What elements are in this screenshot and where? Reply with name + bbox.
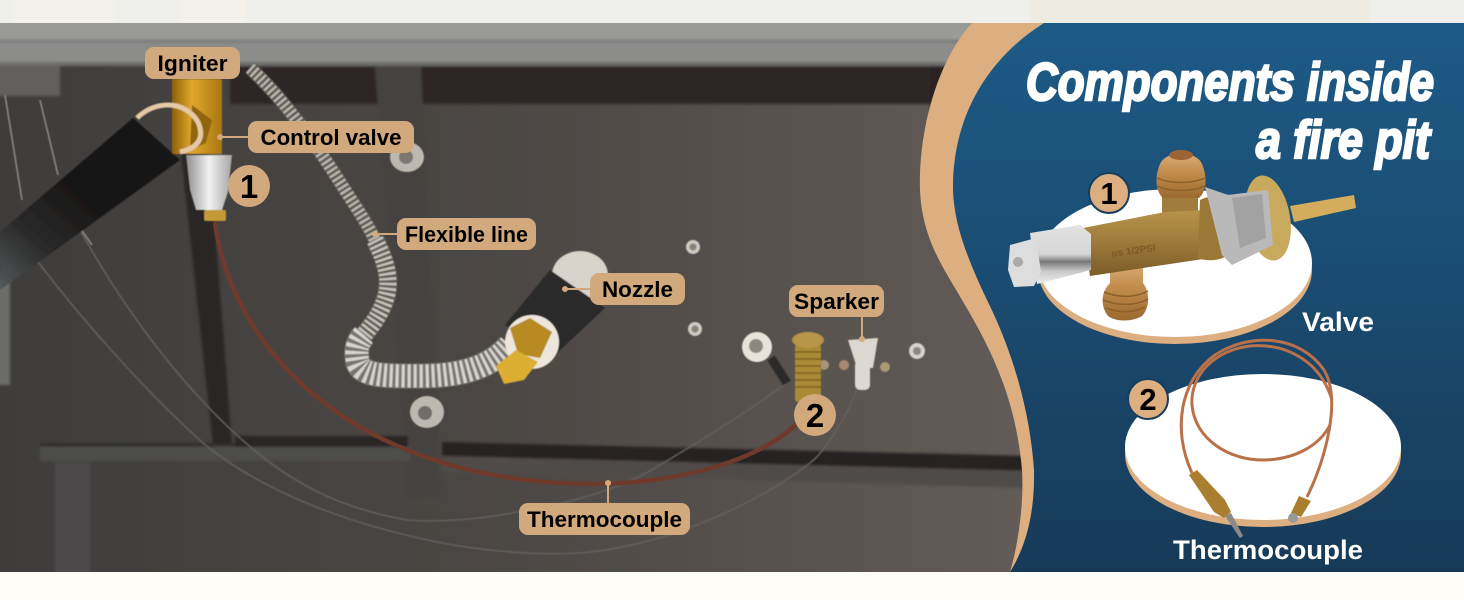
title xyxy=(1026,53,1434,170)
brass body xyxy=(1083,210,1210,276)
callout: Nozzle xyxy=(562,273,685,305)
lower flare fitting xyxy=(1103,262,1148,320)
callout: Flexible line: Flexible line xyxy=(405,222,528,247)
screws xyxy=(390,142,925,428)
thermocouple display disc xyxy=(1125,374,1401,527)
thermocouple product xyxy=(1181,340,1332,538)
lower channel right xyxy=(442,442,1030,471)
number badge 1, photo xyxy=(228,165,270,207)
number badge 1, panel: 1 xyxy=(1100,176,1118,211)
number badge 2, photo: 2 xyxy=(806,397,824,434)
vertical strut xyxy=(374,66,424,105)
callout: Igniter: Igniter xyxy=(158,51,228,76)
silver cap xyxy=(1030,225,1091,284)
blue panel xyxy=(953,23,1464,572)
brass control valve in photo xyxy=(137,79,232,221)
callout: Nozzle: Nozzle xyxy=(602,277,673,302)
number badge 2, panel xyxy=(1128,379,1168,419)
angled gap xyxy=(175,100,232,445)
dark recess under beam xyxy=(229,65,932,105)
nozzle xyxy=(496,251,608,384)
number badge 2, photo xyxy=(794,394,836,436)
left bracket xyxy=(0,66,60,96)
callout: Thermocouple: Thermocouple xyxy=(527,507,682,532)
number badge 1, photo: 1 xyxy=(240,168,258,205)
sparker hardware xyxy=(742,332,878,402)
callout: Sparker xyxy=(789,285,884,342)
top flare fitting xyxy=(1162,195,1198,228)
callout: Control valve xyxy=(217,121,414,153)
callout: Sparker: Sparker xyxy=(794,289,879,314)
black gas hose xyxy=(0,118,180,290)
callout: Control valve: Control valve xyxy=(260,125,402,150)
curved tan border xyxy=(920,23,1100,572)
number badge 2, panel: 2 xyxy=(1139,382,1157,417)
label: Thermocouple, panel: Thermocouple xyxy=(1173,535,1363,565)
callout: Igniter xyxy=(145,47,240,79)
stem xyxy=(1290,195,1356,222)
valve product xyxy=(1008,150,1356,320)
thin grey wires xyxy=(5,95,858,554)
callout: Thermocouple xyxy=(519,480,690,535)
valve collar xyxy=(1198,197,1238,260)
valve product: us 1/2PSI xyxy=(1111,243,1157,260)
lower channel left xyxy=(40,447,410,461)
thermocouple wire xyxy=(215,222,800,484)
top grey beam xyxy=(0,23,972,64)
valve display disc xyxy=(1038,189,1312,344)
title: a fire pit xyxy=(1256,111,1432,170)
number badge 1, panel xyxy=(1089,173,1129,213)
top background strip xyxy=(0,0,1464,23)
mounting flange xyxy=(1239,172,1297,264)
photo: fire pit underside xyxy=(0,20,1060,577)
callout: Flexible line xyxy=(372,218,536,250)
label: Valve: Valve xyxy=(1302,307,1374,337)
silver mechanism xyxy=(1205,187,1273,265)
flexible gas line xyxy=(250,68,510,376)
